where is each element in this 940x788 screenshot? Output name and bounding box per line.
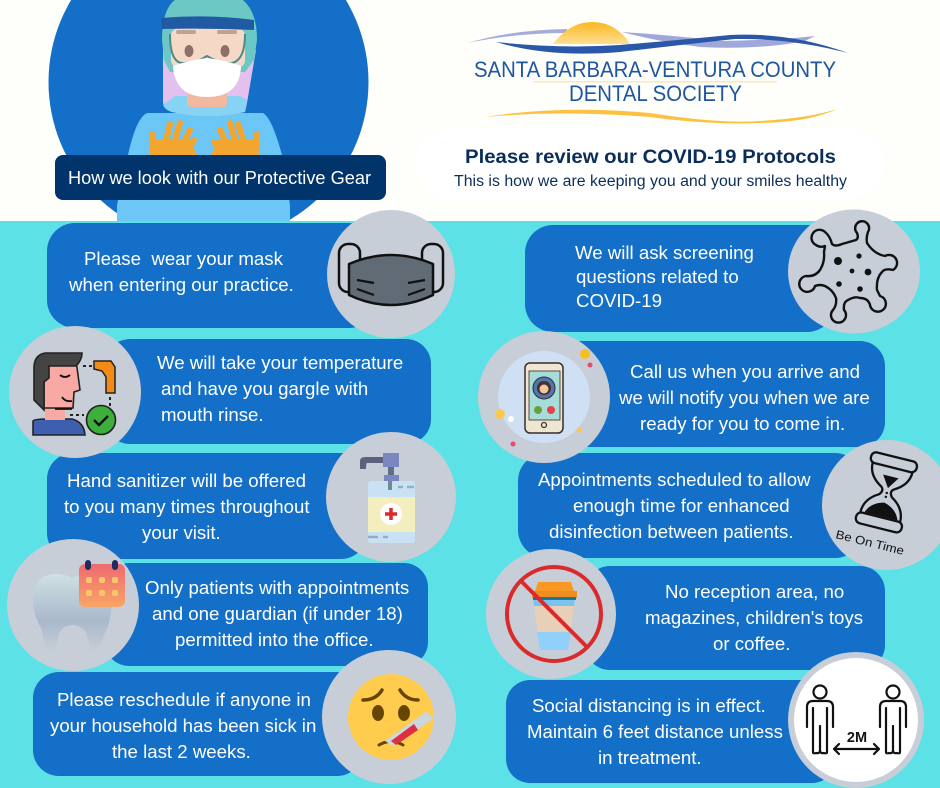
panel: call on arrival: Call us when you arrive and [630,361,860,382]
panel: temperature check: and have you gargle with [161,378,368,399]
panel: appointment scheduling: enough time for enhanced [573,495,790,516]
panel: call on arrival: ready for you to come in. [640,413,845,434]
icon: tooth and calendar [7,539,139,671]
panel: appointments only: Only patients with appointments [145,577,409,598]
icon: face mask [327,210,455,338]
panel: social distancing: in treatment. [598,747,702,768]
panel: call on arrival: we will notify you when we are [618,387,870,408]
panel: appointment scheduling [518,453,863,558]
icon: hourglass be on time [822,440,940,570]
heading: covid protocols [415,130,885,198]
panel: call on arrival [555,341,885,447]
panel: appointment scheduling: disinfection between patients. [549,521,794,542]
cyan background band [0,221,940,788]
panel: wear mask [47,223,377,328]
panel: hand sanitizer [47,453,367,559]
heading: covid protocols: This is how we are keeping you and your smiles healthy [454,173,847,190]
caption: protective gear: How we look with our Protective Gear [68,167,371,188]
panel: wear mask: Please wear your mask [84,248,284,269]
icon: temperature check [9,326,141,458]
hero illustration: protective gear [48,0,368,242]
icon: two metre distance [788,652,924,788]
panel: social distancing: Maintain 6 feet distance unless [527,721,783,742]
logo: dental society: SANTA BARBARA-VENTURA COUNTY [474,57,836,82]
panel: no reception area: magazines, children's toys [645,607,863,628]
logo: dental society: DENTAL SOCIETY [569,81,742,106]
panel: screening questions [525,225,835,332]
panel: hand sanitizer: Hand sanitizer will be offered [67,470,306,491]
panel: hand sanitizer: your visit. [142,522,221,543]
panel: appointments only: and one guardian (if under 18) [152,603,403,624]
panel: no reception area [585,566,885,670]
panel: appointments only [105,563,428,666]
panel: reschedule if sick [33,672,363,776]
panel: temperature check: mouth rinse. [161,404,264,425]
panel: social distancing: Social distancing is in effect. [532,695,766,716]
icon: two metre distance: 2M [847,730,867,746]
panel: reschedule if sick: Please reschedule if anyone in [57,689,311,710]
logo: dental society [468,22,848,123]
panel: screening questions: COVID-19 [576,290,662,311]
icon: virus [788,210,920,334]
icon: phone call [478,331,610,463]
icon: no coffee [486,549,616,679]
panel: temperature check [105,339,431,444]
panel: wear mask: when entering our practice. [68,274,294,295]
panel: no reception area: or coffee. [713,633,790,654]
panel: screening questions: questions related to [576,266,739,287]
panel: appointments only: permitted into the office. [175,629,374,650]
icon: hourglass be on time: Be On Time [834,527,906,558]
icon: hand sanitizer [326,432,456,562]
heading: covid protocols: Please review our COVID-19 Protocols [465,146,836,168]
caption: protective gear [55,155,386,200]
panel: reschedule if sick: the last 2 weeks. [112,741,251,762]
panel: social distancing [506,680,836,783]
panel: hand sanitizer: to you many times throughout [64,496,310,517]
panel: temperature check: We will take your temperature [157,352,403,373]
icon: sick emoji [322,650,456,784]
panel: screening questions: We will ask screening [575,242,754,263]
panel: appointment scheduling: Appointments scheduled to allow [538,469,811,490]
panel: no reception area: No reception area, no [665,581,844,602]
panel: reschedule if sick: your household has been sick in [50,715,316,736]
